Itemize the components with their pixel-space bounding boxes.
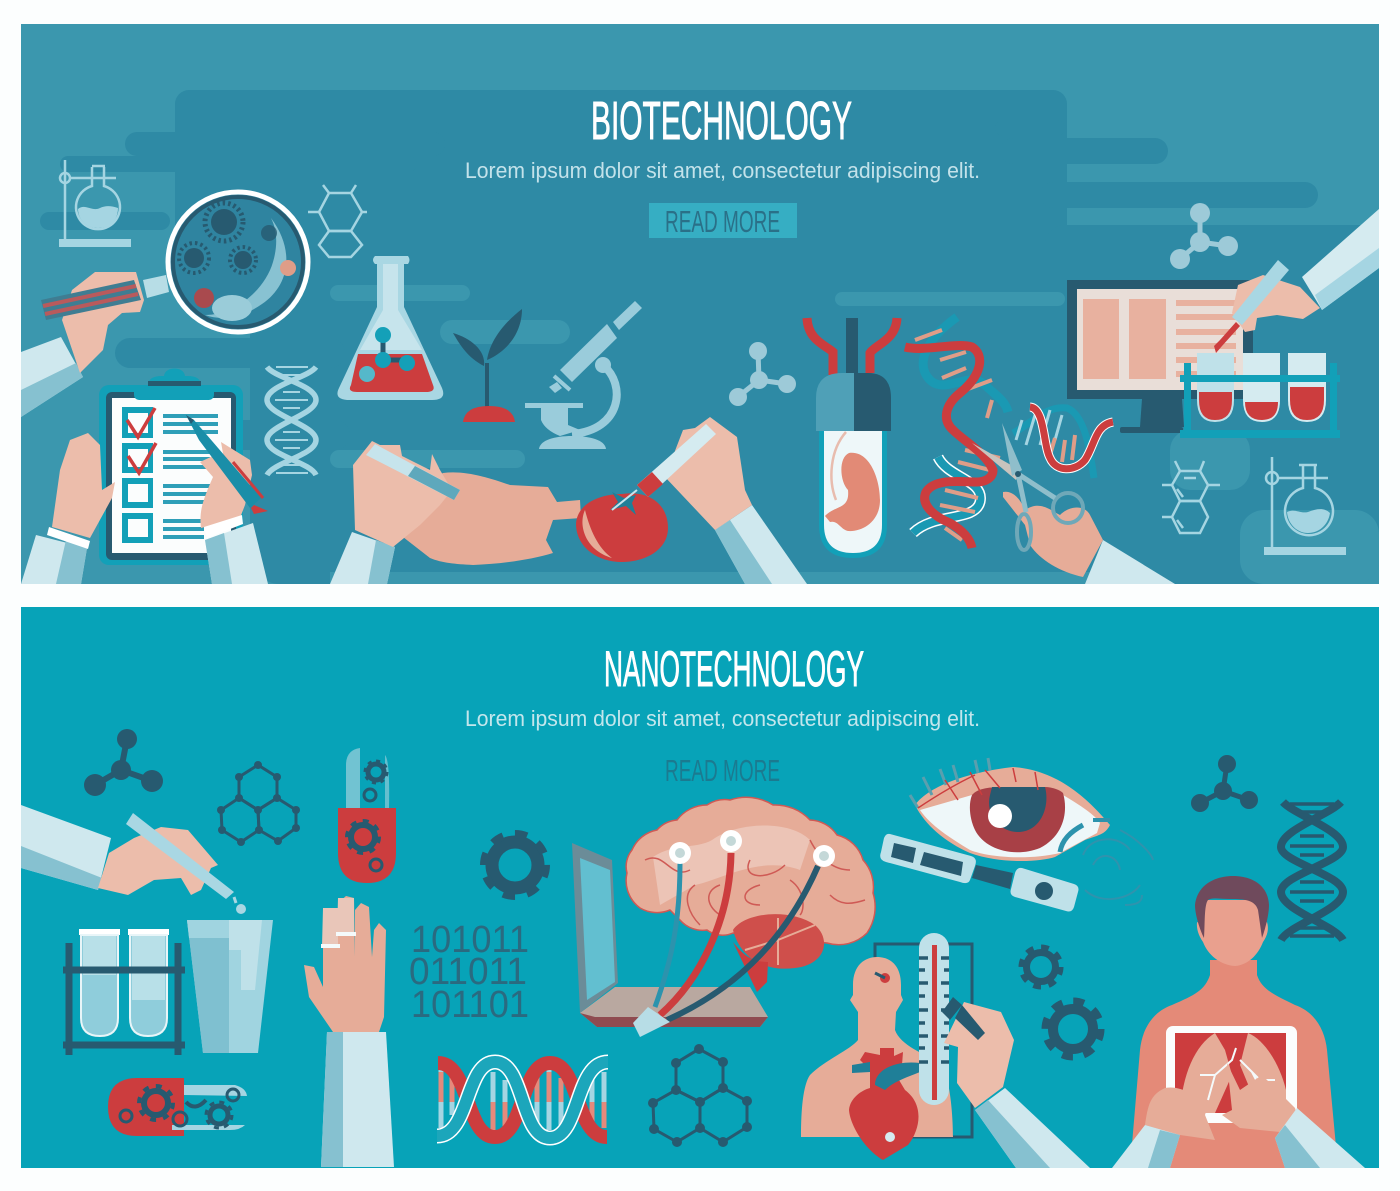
icon: raised hand with sleeve [304,896,394,1167]
icon: tomato [576,492,668,562]
icon: hexagon lattice left [217,761,300,846]
icon: small red DNA [1013,407,1113,478]
icon: gear medium [1045,1001,1101,1057]
panel: nanotechnology [21,607,1379,1168]
icon: nano device bar [880,834,1078,912]
icon: test tube rack [1180,353,1340,438]
text: binary digits: 101011 [411,919,529,961]
icon: eye [910,758,1153,905]
icon: hexagon lattice centre [648,1044,752,1147]
icon: dark gear centre [484,834,546,896]
icon: sprout [453,309,522,422]
icon: clipboard checklist [99,368,243,565]
icon: hand with pipette [21,805,246,914]
icon: test tubes rack [63,929,185,1055]
title: biotechnology: BIOTECHNOLOGY [591,91,852,151]
icon: glass beaker [187,920,273,1053]
icon: erlenmeyer flask [337,256,443,400]
icon: molecule centre [729,342,796,406]
icon: right hand with syringe [612,417,807,584]
icon: horizontal DNA [437,1060,608,1138]
icon: brain with electrodes [626,797,875,1037]
icon: large DNA helix [905,317,1008,548]
icon: molecule right [1170,203,1238,269]
icon: hand holding tweezers [942,997,1090,1168]
icon: gear small [1021,947,1061,987]
icon: man with tablet [1112,876,1365,1168]
subtitle: biotechnology: Lorem ipsum dolor sit amet, consectetur adipiscing elit. [465,158,980,183]
icon: laptop [572,843,768,1027]
icon: hexagon molecule bottom right [1162,461,1220,533]
text: binary digits: 101101 [411,984,529,1026]
icon: left hand on clipboard [21,433,115,584]
icon: light DNA helix left [267,367,316,475]
icon: capsule tube with gears [338,748,396,883]
icon: piglet with hands and syringe [330,441,581,584]
icon: hand holding magnifier [21,272,144,417]
title: nanotechnology: NANOTECHNOLOGY [604,641,864,697]
icon: hexagon molecule top [308,185,367,257]
button: read more: READ MORE [665,204,780,239]
button: read more [649,203,797,239]
icon: test tube with embryo [807,318,897,558]
icon: dark DNA vertical [1281,802,1343,940]
icon: flask on stand left [59,160,131,247]
subtitle: nanotechnology: Lorem ipsum dolor sit amet, consectetur adipiscing elit. [465,706,980,731]
text: binary digits [409,919,529,1026]
icon: hand with scissors [972,423,1175,584]
icon: dark molecule right [1191,755,1258,812]
text: binary digits: 011011 [409,951,527,993]
panel: biotechnology [21,24,1379,584]
icon: computer monitor [1067,280,1253,433]
icon: dark molecule left [84,729,163,796]
icon: right hand writing with pen [186,415,268,584]
icon: microscope [525,301,642,449]
icon: nano pill with gears [108,1078,247,1136]
icon: magnifier with microbes [143,192,308,332]
button: read more: READ MORE [665,753,780,788]
icon: torso with thermometer and heart [801,933,972,1160]
icon: flask on stand right [1264,457,1346,555]
icon: hand with pipette [1214,209,1379,353]
